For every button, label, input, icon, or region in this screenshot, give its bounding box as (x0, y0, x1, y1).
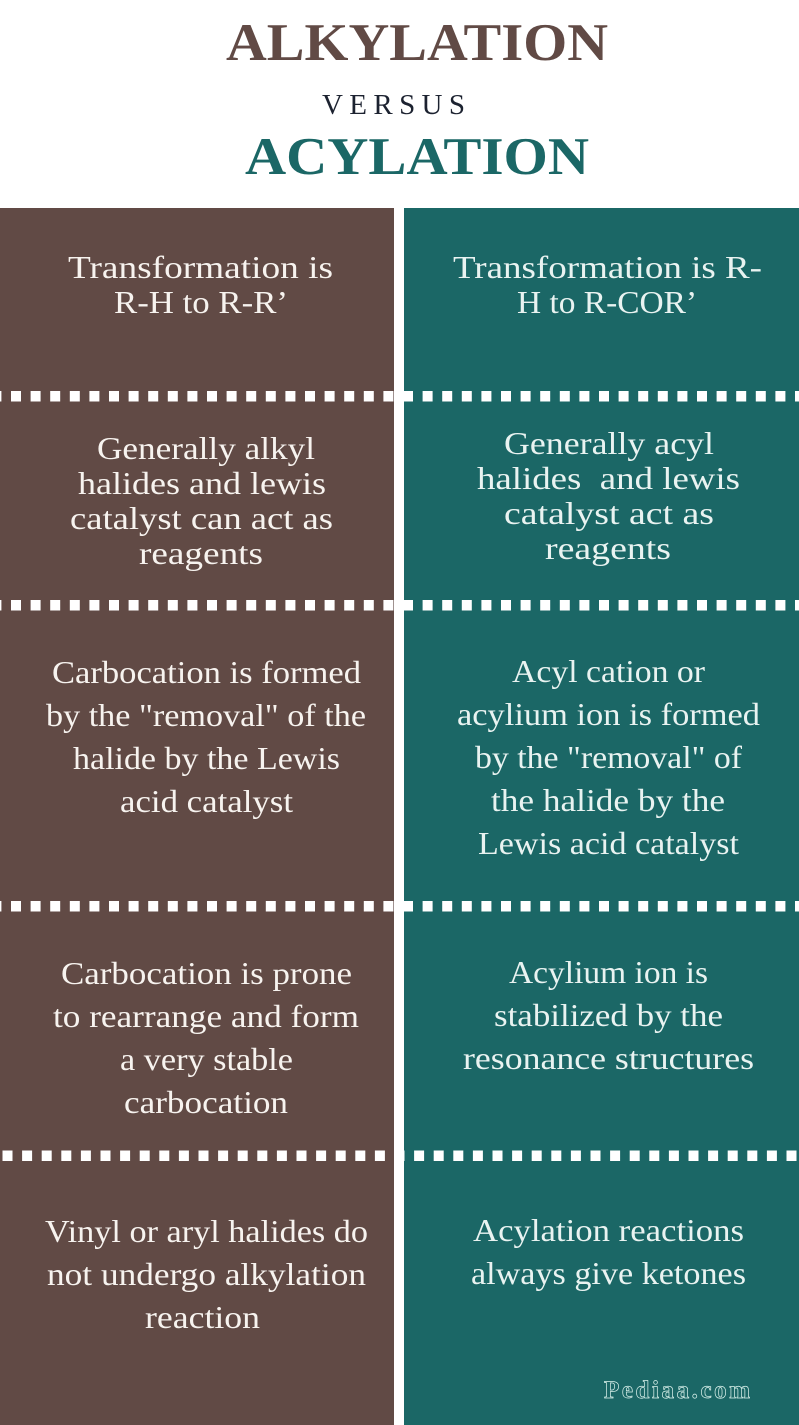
alkylation row 3: carbocation formation (46, 654, 366, 819)
alkylation row 3: carbocation formation: Carbocation is formed (52, 654, 361, 690)
acylation row 4: stabilization: resonance structures (463, 1040, 754, 1076)
acylation row 4: stabilization (463, 954, 754, 1076)
title: Alkylation: ALKYLATION (226, 14, 608, 72)
alkylation row 2: reagents: catalyst can act as (70, 500, 333, 536)
alkylation row 4: rearrangement: carbocation (124, 1084, 288, 1120)
alkylation row 3: carbocation formation: acid catalyst (120, 783, 293, 819)
acylation row 3: acylium ion formation: Lewis acid catalyst (478, 825, 739, 861)
alkylation row 2: reagents (70, 430, 333, 571)
alkylation row 2: reagents: halides and lewis (78, 465, 326, 501)
alkylation row 1: transformation (68, 249, 333, 320)
alkylation row 4: rearrangement: a very stable (120, 1041, 293, 1077)
acylation row 1: transformation: H to R-COR’ (517, 284, 697, 320)
alkylation row 5: vinyl and aryl halides: not undergo alkylation (47, 1256, 366, 1292)
alkylation row 1: transformation: Transformation is (68, 249, 333, 285)
acylation row 3: acylium ion formation: acylium ion is formed (457, 696, 760, 732)
alkylation row 2: reagents: Generally alkyl (97, 430, 315, 466)
alkylation row 5: vinyl and aryl halides: Vinyl or aryl halides do (45, 1213, 368, 1249)
acylation row 5: ketones: Acylation reactions (473, 1212, 744, 1248)
acylation row 4: stabilization: Acylium ion is (509, 954, 708, 990)
alkylation row 3: carbocation formation: by the "removal" of the (46, 697, 366, 733)
title block (226, 14, 608, 186)
logo: Pediaa.com: Pediaa.com (604, 1377, 750, 1404)
subtitle: versus: VERSUS (322, 89, 465, 121)
alkylation row 4: rearrangement: to rearrange and form (53, 998, 359, 1034)
acylation row 2: reagents (477, 425, 740, 566)
alkylation row 3: carbocation formation: halide by the Lewis (73, 740, 340, 776)
acylation row 2: reagents: catalyst act as (504, 495, 714, 531)
alkylation row 4: rearrangement (53, 955, 359, 1120)
acylation row 2: reagents: reagents (545, 530, 671, 566)
alkylation row 5: vinyl and aryl halides (45, 1213, 368, 1335)
acylation row 4: stabilization: stabilized by the (494, 997, 723, 1033)
acylation row 5: ketones: always give ketones (471, 1255, 746, 1291)
acylation row 3: acylium ion formation (457, 653, 760, 861)
title: Acylation: ACYLATION (245, 128, 589, 186)
alkylation row 1: transformation: R-H to R-R’ (114, 284, 288, 320)
acylation row 3: acylium ion formation: the halide by the (491, 782, 725, 818)
acylation row 1: transformation (453, 249, 762, 320)
acylation row 5: ketones (471, 1212, 746, 1291)
alkylation row 2: reagents: reagents (139, 535, 263, 571)
acylation row 2: reagents: halides and lewis (477, 460, 740, 496)
acylation row 3: acylium ion formation: Acyl cation or (512, 653, 705, 689)
acylation row 2: reagents: Generally acyl (504, 425, 714, 461)
alkylation row 4: rearrangement: Carbocation is prone (61, 955, 352, 991)
alkylation row 5: vinyl and aryl halides: reaction (145, 1299, 260, 1335)
acylation row 3: acylium ion formation: by the "removal" of (475, 739, 742, 775)
acylation row 1: transformation: Transformation is R- (453, 249, 762, 285)
panel: alkylation column (0, 208, 394, 1425)
panel: acylation column (404, 208, 799, 1425)
